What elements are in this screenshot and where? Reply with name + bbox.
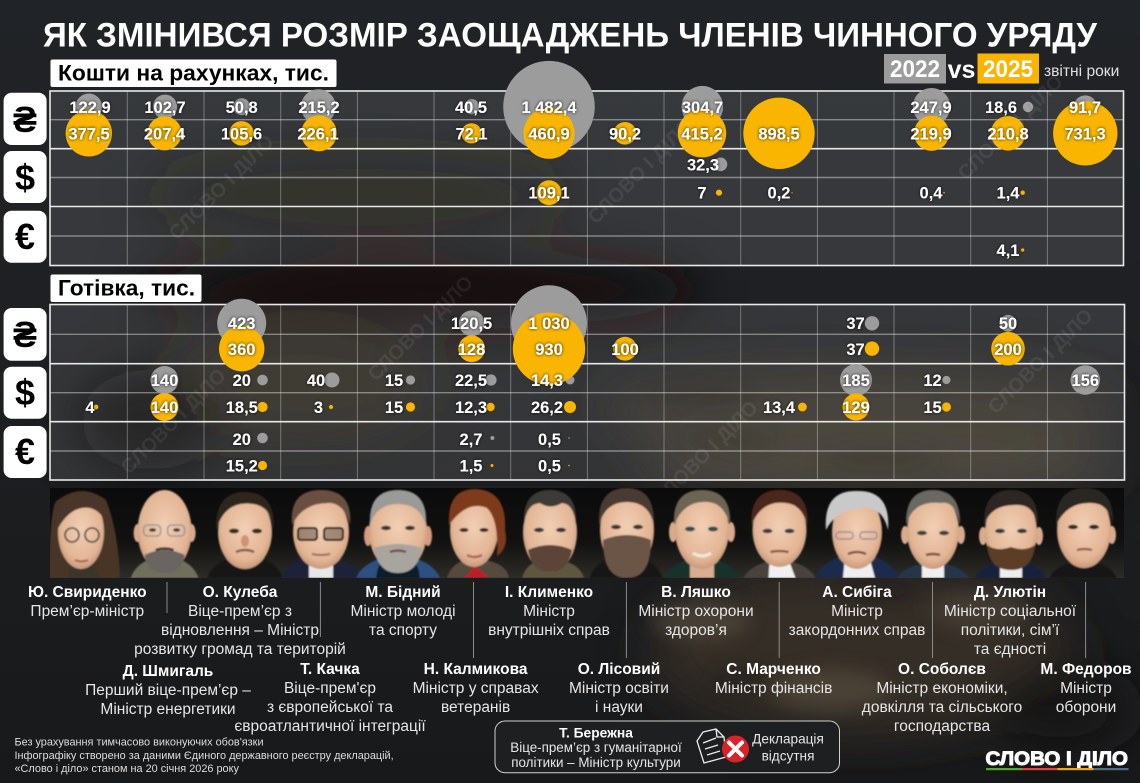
value labels cash: 3 [314, 399, 323, 417]
value labels accounts: 7 [697, 184, 707, 202]
value labels accounts: 32,3 [687, 156, 719, 174]
label: Kalmykova [413, 661, 539, 716]
icon: euro accounts [4, 211, 47, 263]
value labels accounts: 1,4 [997, 184, 1020, 202]
icon: hryvnia accounts: ₴ [13, 99, 37, 140]
watermarks: СЛОВО І ДІЛО [117, 365, 231, 479]
title: ЯК ЗМІНИВСЯ РОЗМІР ЗАОЩАДЖЕНЬ ЧЛЕНІВ ЧИННОГО УРЯДУ [43, 16, 1098, 54]
bubbles 2025 cash [94, 312, 1025, 470]
callout: Berezhna no declaration: політики – Міністр культури [511, 755, 681, 770]
icon: hryvnia accounts [4, 93, 47, 145]
label: Kalmykova: ветеранів [441, 699, 510, 716]
value labels cash: 156 [1072, 372, 1099, 390]
footnotes [14, 736, 394, 775]
label: Kachka: з європейської та [267, 699, 393, 716]
bubbles 2022 accounts [76, 61, 1097, 171]
icon: missing declaration [697, 729, 749, 763]
label: Liashko: Міністр охорони [638, 603, 754, 620]
portrait: Kalmykova [447, 489, 509, 578]
watermarks: СЛОВО І ДІЛО [584, 115, 698, 229]
bubbles 2022 cash [150, 285, 1100, 443]
value labels accounts: 215,2 [298, 99, 340, 117]
footnotes: Без урахування тимчасово виконуючих обов'язки [14, 736, 264, 748]
value labels accounts: 90,2 [609, 126, 641, 144]
value labels cash: 930 [535, 341, 563, 359]
portrait: Liashko [664, 490, 740, 578]
icon: dollar cash: $ [15, 372, 35, 413]
watermarks [117, 71, 1098, 511]
value labels accounts: 210,8 [987, 126, 1029, 144]
value labels accounts: 4,1 [997, 242, 1019, 260]
value labels cash: 26,2 [531, 399, 563, 417]
heading: cash: Готівка, тис. [58, 276, 195, 300]
label: Sybiha: А. Сибіга [822, 584, 892, 601]
value labels cash: 1,5 [460, 458, 482, 476]
value labels cash: 22,5 [455, 372, 487, 390]
value labels cash: 20 [233, 372, 251, 390]
portrait: Bidnyi [356, 490, 440, 578]
icon: dollar accounts: $ [15, 157, 35, 198]
bubbles 2025 accounts [66, 98, 1118, 252]
portrait: Soboliev [897, 490, 969, 578]
portrait: Marchenko [744, 490, 816, 578]
logo: Слово і діло: СЛОВО І ДІЛО [986, 748, 1128, 770]
legend: reporting years: 2022 [890, 56, 940, 83]
label: Uliutin: Д. Улютін [974, 584, 1046, 601]
watermarks: СЛОВО І ДІЛО [954, 71, 1068, 185]
label: Kuleba [134, 584, 346, 658]
value labels accounts: 1 482,4 [521, 99, 577, 117]
value labels accounts [68, 99, 1106, 260]
value labels accounts: 415,2 [681, 126, 723, 144]
value labels cash: 15 [923, 399, 942, 417]
value labels cash: 15,2 [226, 458, 258, 476]
value labels cash: 200 [994, 341, 1022, 359]
value labels accounts: 247,9 [910, 99, 952, 117]
label: Fedorov: оборони [1056, 699, 1116, 716]
value labels cash [85, 315, 1099, 476]
value labels cash: 140 [151, 399, 178, 417]
value labels cash: 40 [307, 372, 325, 390]
minister labels [28, 584, 1132, 735]
label: Kachka: євроатлантичної інтеграції [234, 718, 426, 735]
value labels accounts: 226,1 [297, 126, 339, 144]
portrait: Sybiha [815, 491, 899, 578]
portrait: Shmyhal [131, 490, 199, 578]
value labels accounts: 460,9 [528, 126, 570, 144]
legend: reporting years: 2025 [983, 56, 1033, 83]
callout: Berezhna no declaration [495, 721, 840, 773]
value labels cash: 15 [385, 399, 403, 417]
label: Fedorov: М. Федоров [1040, 661, 1132, 678]
legend: reporting years [884, 54, 1119, 84]
label: Kuleba: розвитку громад та територій [134, 641, 346, 658]
label: Shmyhal [85, 663, 251, 718]
label: Sybiha [789, 584, 925, 639]
legend: reporting years: vs [948, 56, 975, 84]
value labels accounts: 109,1 [528, 184, 570, 202]
value labels accounts: 898,5 [758, 126, 800, 144]
value labels cash: 37 [846, 315, 865, 333]
value labels cash: 12 [923, 372, 942, 390]
label: Klymenko: І. Клименко [505, 584, 593, 601]
watermarks: СЛОВО І ДІЛО [984, 305, 1098, 419]
value labels cash: 18,5 [226, 399, 258, 417]
value labels accounts: 122,9 [69, 99, 111, 117]
value labels cash: 129 [842, 399, 870, 417]
icon: dollar accounts [4, 151, 47, 203]
value labels accounts: 102,7 [144, 99, 186, 117]
label: Kachka: Т. Качка [300, 661, 360, 678]
label: Lisovyi: О. Лісовий [578, 661, 660, 678]
value labels accounts: 207,4 [144, 126, 186, 144]
label: Uliutin: політики, сім’ї [961, 622, 1060, 639]
label: Svyrydenko [28, 584, 147, 620]
value labels cash: 20 [233, 431, 251, 449]
label: Shmyhal: Д. Шмигаль [123, 663, 213, 680]
watermarks: СЛОВО І ДІЛО [364, 272, 478, 386]
label: Fedorov [1040, 661, 1132, 716]
value labels cash: 12,3 [455, 399, 487, 417]
value labels accounts: 377,5 [68, 126, 110, 144]
footnotes: «Слово і діло» станом на 20 січня 2026 року [14, 763, 239, 775]
label: Bidnyi [350, 584, 456, 639]
label: Liashko: В. Ляшко [661, 584, 731, 601]
label: Liashko [638, 584, 754, 639]
value labels accounts: 72,1 [455, 126, 488, 144]
label: Soboliev: господарства [894, 718, 990, 735]
label: Shmyhal: Перший віце-прем’єр – [85, 682, 251, 699]
label: Bidnyi: та спорту [369, 622, 437, 639]
icon: euro cash [4, 426, 47, 478]
label: Kachka [234, 661, 426, 735]
label: Marchenko: Міністр фінансів [715, 680, 832, 697]
watermarks: СЛОВО І ДІЛО [649, 397, 763, 511]
value labels accounts: 91,7 [1069, 99, 1101, 117]
footnotes: Інфографіку створено за даними Єдиного державного реєстру декларацій, [14, 750, 394, 762]
label: Kalmykova: Міністр у справах [413, 680, 539, 697]
value labels cash: 4 [85, 399, 95, 417]
value labels accounts: 50,8 [226, 99, 258, 117]
label: Fedorov: Міністр [1060, 680, 1112, 697]
icon: hryvnia cash [4, 308, 47, 361]
value labels accounts: 304,7 [682, 99, 723, 117]
value labels cash: 423 [228, 315, 255, 333]
panel: cash table [50, 285, 1124, 480]
value labels cash: 50 [999, 315, 1017, 333]
label: Shmyhal: Міністр енергетики [100, 701, 236, 718]
label: Kachka: Віце-прем'єр [284, 680, 376, 697]
label: Lisovyi: Міністр освіти [569, 680, 669, 697]
callout: Berezhna no declaration: Віце-прем’єр з гуманітарної [510, 740, 682, 755]
portrait: Svyrydenko [49, 491, 120, 578]
value labels cash: 0,5 [538, 458, 561, 476]
label: Svyrydenko: Ю. Свириденко [28, 584, 147, 601]
label: Svyrydenko: Прем’єр-міністр [30, 603, 144, 620]
legend: reporting years: звітні роки [1044, 63, 1119, 80]
value labels cash: 128 [458, 341, 485, 359]
label: Kuleba: відновлення – Міністр [161, 622, 319, 639]
label: Liashko: здоров’я [665, 622, 727, 639]
value labels accounts: 105,6 [221, 126, 262, 144]
value labels accounts: 219,9 [910, 126, 952, 144]
label: Bidnyi: М. Бідний [365, 584, 441, 601]
portrait: Klymenko [522, 490, 584, 578]
label: Soboliev: О. Соболєв [898, 661, 986, 678]
value labels cash: 120,5 [451, 315, 492, 333]
label: Kuleba: О. Кулеба [203, 584, 278, 601]
value labels accounts: 40,5 [455, 99, 487, 117]
label: Kalmykova: Н. Калмикова [424, 661, 528, 678]
portrait: Kuleba [207, 492, 283, 578]
callout: Berezhna no declaration: відсутня [762, 748, 814, 764]
value labels cash: 13,4 [763, 399, 796, 417]
watermarks: СЛОВО І ДІЛО [165, 131, 279, 245]
label: Klymenko: внутрішніх справ [488, 622, 610, 639]
label: Marchenko: С. Марченко [726, 661, 821, 678]
label: Lisovyi: і науки [595, 699, 643, 716]
icon: euro accounts: € [15, 216, 35, 257]
currency icons [4, 93, 47, 478]
callout: Berezhna no declaration: Т. Бережна [559, 726, 633, 740]
portraits row [49, 488, 1124, 578]
value labels cash: 185 [842, 372, 870, 390]
value labels accounts: 0,4 [920, 184, 943, 202]
label: Marchenko [715, 661, 832, 697]
portrait: Lisovyi [589, 488, 663, 578]
label: Kuleba: Віце-прем’єр з [188, 603, 292, 620]
value labels cash: 140 [151, 372, 178, 390]
icon: dollar cash [4, 367, 47, 419]
value labels cash: 15 [385, 372, 403, 390]
label: Uliutin: та єдності [974, 641, 1046, 658]
label: Sybiha: закордонних справ [789, 622, 925, 639]
label: Sybiha: Міністр [831, 603, 883, 620]
value labels cash: 100 [611, 341, 639, 359]
heading: accounts: Кошти на рахунках, тис. [58, 60, 329, 86]
value labels cash: 360 [228, 341, 255, 359]
label: Klymenko [488, 584, 610, 639]
value labels cash: 1 030 [528, 315, 570, 333]
value labels cash: 14,3 [531, 372, 563, 390]
portrait: Kachka [281, 490, 361, 578]
icon: hryvnia cash: ₴ [13, 314, 37, 355]
callout: Berezhna no declaration: Декларація [752, 732, 824, 746]
value labels cash: 37 [846, 341, 865, 359]
label: Uliutin [944, 584, 1077, 658]
icon: euro cash: € [15, 431, 35, 472]
label: Soboliev: Міністр економіки, [876, 680, 1008, 697]
label: Klymenko: Міністр [523, 603, 575, 620]
label: Lisovyi [569, 661, 669, 716]
label: Soboliev [862, 661, 1022, 735]
value labels cash: 0,5 [538, 431, 561, 449]
label: Bidnyi: Міністр молоді [350, 603, 456, 620]
value labels cash: 2,7 [460, 431, 482, 449]
panel: accounts table [50, 61, 1124, 266]
portrait: Fedorov [1049, 488, 1117, 578]
value labels accounts: 18,6 [985, 99, 1017, 117]
label: Soboliev: довкілля та сільського [862, 699, 1022, 716]
label: Uliutin: Міністр соціальної [944, 603, 1077, 620]
portrait: Uliutin [975, 490, 1047, 578]
value labels accounts: 0,2 [768, 184, 790, 202]
value labels accounts: 731,3 [1064, 126, 1106, 144]
